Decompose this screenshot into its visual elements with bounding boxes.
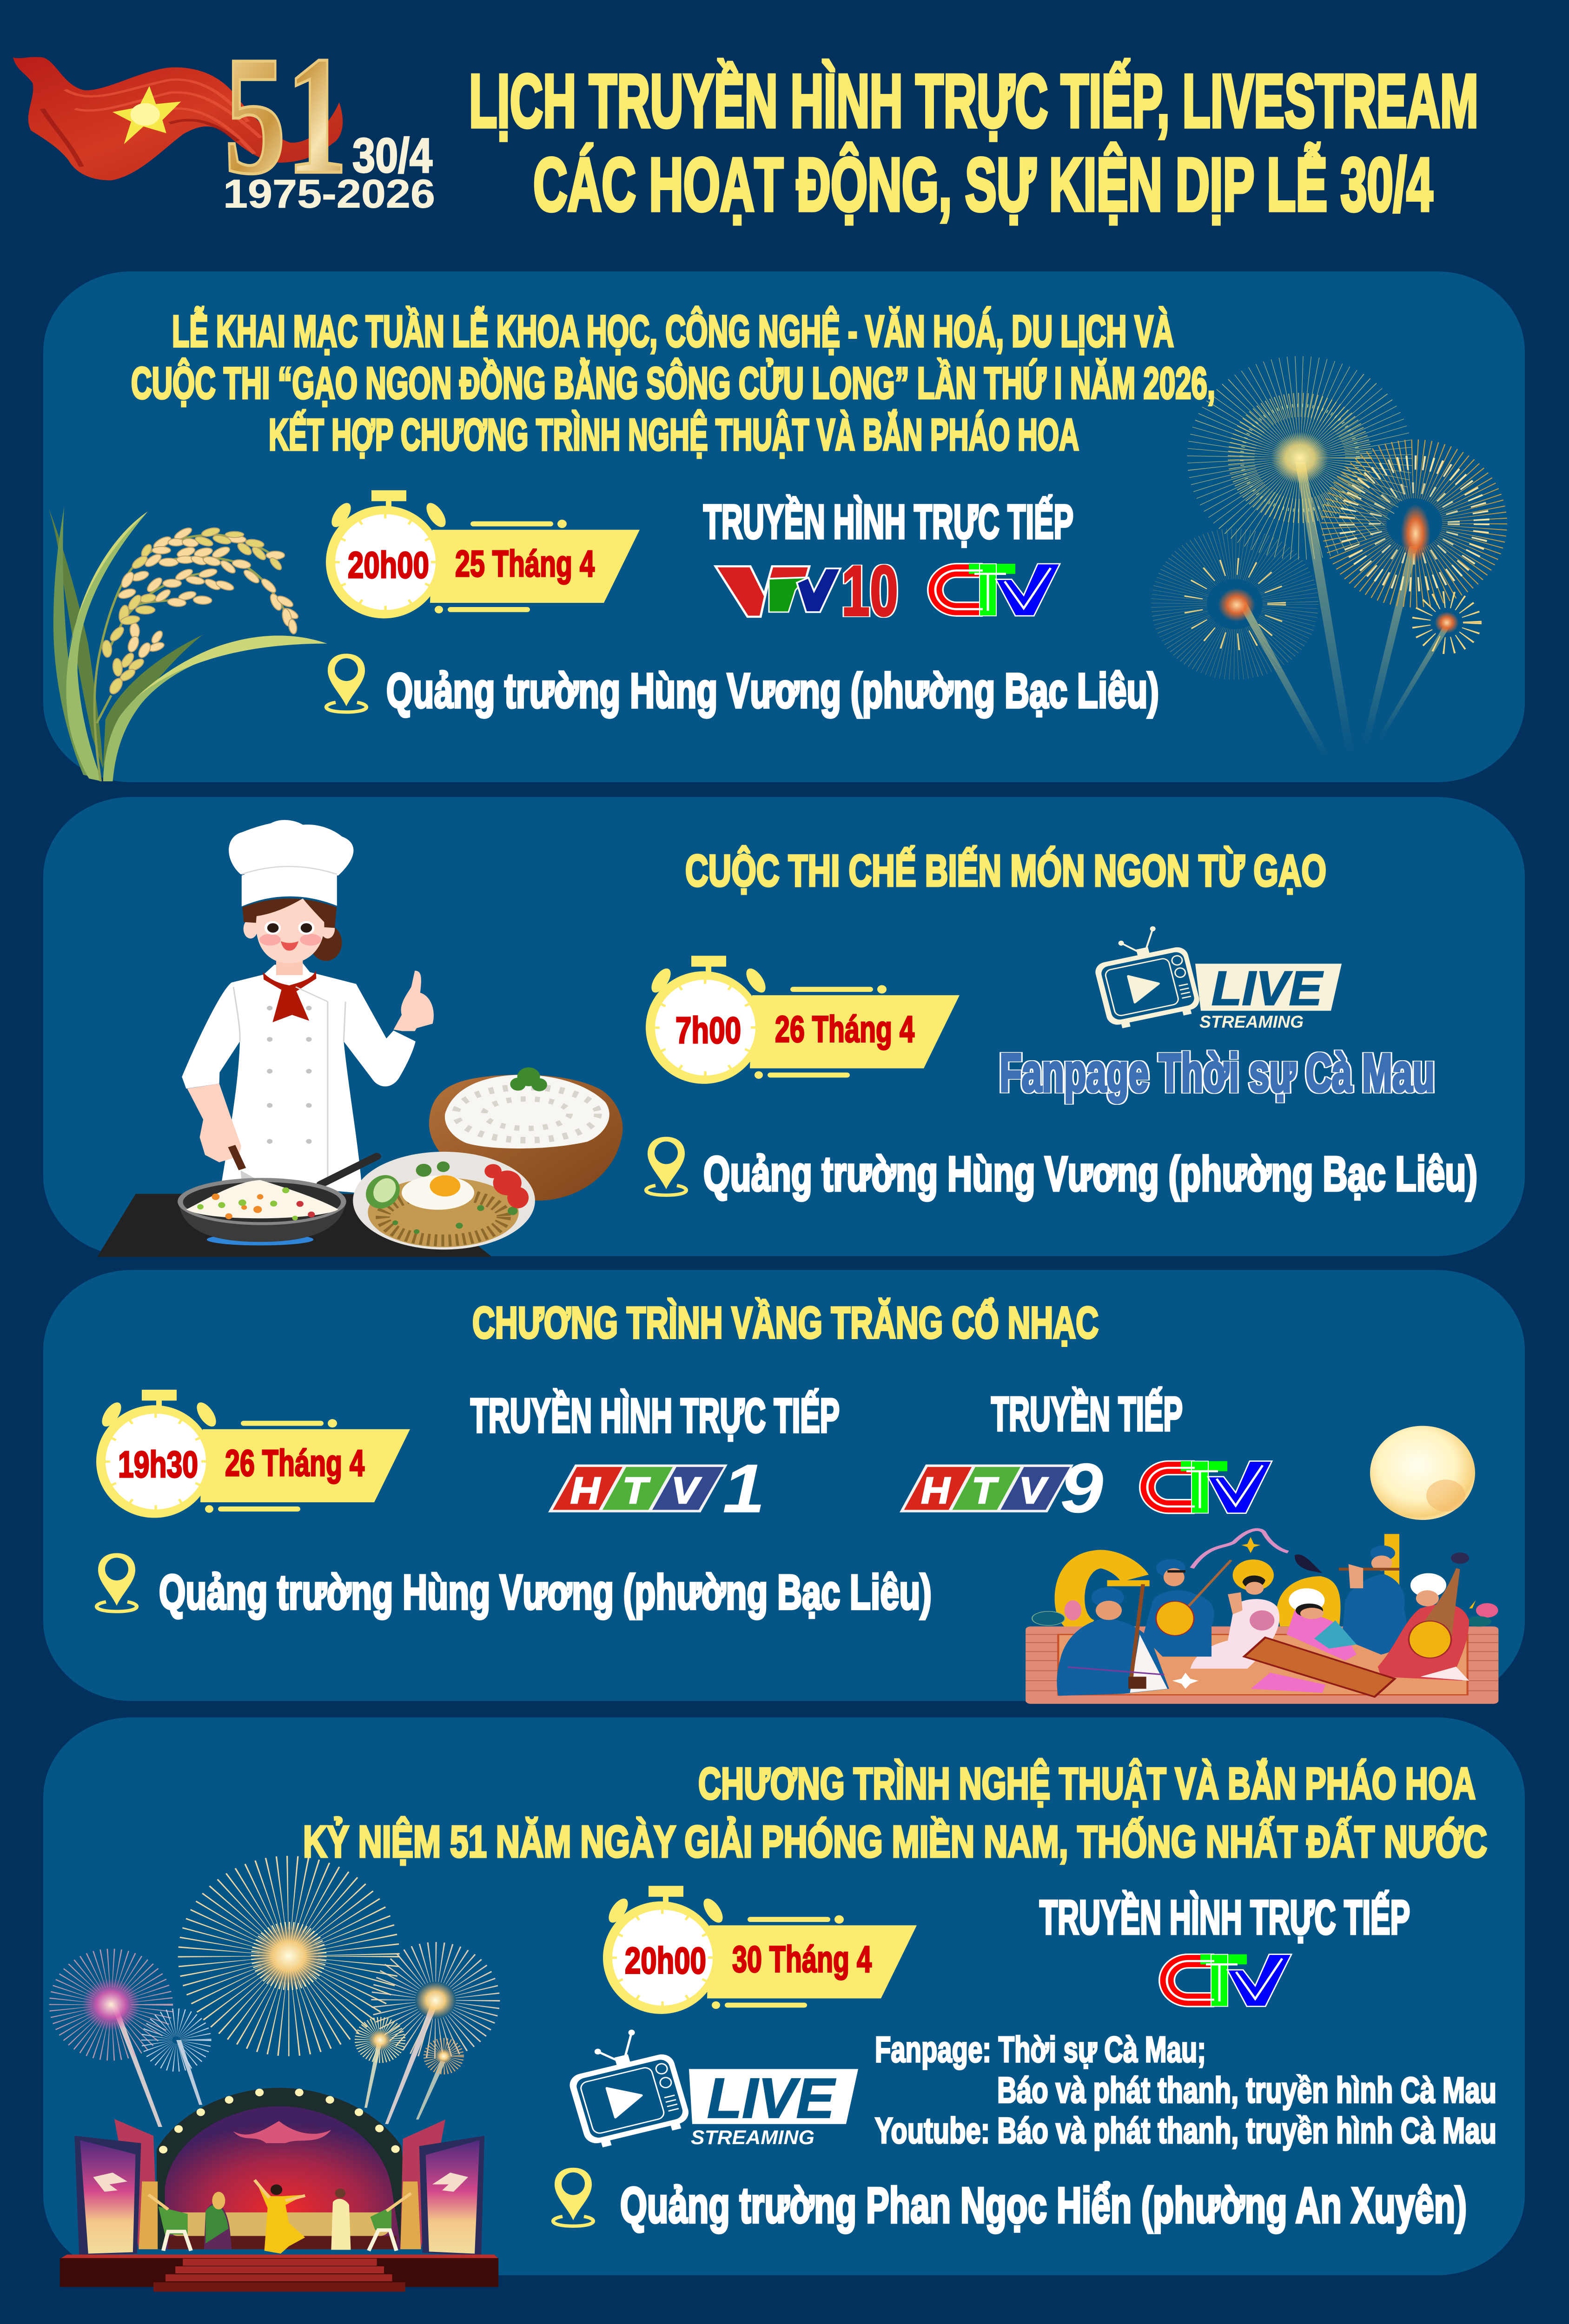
panel: opening ceremony 25 April: 10 — [841, 551, 898, 631]
icon: waving red flag with star — [13, 57, 343, 180]
livestream channels — [875, 2029, 1496, 2151]
flowers — [1032, 1600, 1498, 1627]
header logo: flag and 51 years emblem — [13, 21, 435, 216]
panel: moon music programme 26 April: 26 Tháng 4 — [225, 1443, 364, 1484]
illustration: traditional music ensemble — [1026, 1530, 1498, 1704]
logo: live streaming: STREAMING — [691, 2126, 814, 2149]
location pin — [646, 1137, 686, 1195]
zither player — [1244, 1588, 1395, 1697]
logo: live streaming: LIVE — [1212, 961, 1324, 1015]
icon: full moon — [1370, 1426, 1475, 1520]
logo: HTV9: 9 — [1060, 1448, 1103, 1527]
years 1975-2026: 1975-2026 — [223, 172, 435, 216]
stage base and stairs — [60, 2255, 498, 2291]
panel: opening ceremony 25 April: 25 Tháng 4 — [455, 543, 595, 585]
location pin — [97, 1553, 137, 1611]
illustration: stage and fireworks — [60, 1893, 498, 2291]
number 51 in gold: 51 — [224, 21, 348, 209]
time badge: 20h00 30 Tháng 4 — [603, 1886, 917, 2014]
title — [469, 59, 1478, 226]
side screens — [74, 2119, 484, 2256]
singer — [1190, 1559, 1279, 1669]
location pin — [553, 2168, 593, 2226]
time badge: 19h30 26 Tháng 4: 19h30 — [118, 1444, 198, 1485]
panel: rice cooking contest 26 April: 26 Tháng 4 — [775, 1009, 914, 1050]
stove — [97, 1194, 492, 1257]
logo: HTV1: 1 — [722, 1450, 765, 1527]
location pin — [326, 654, 366, 712]
heading: art programme and fireworks — [303, 1758, 1487, 1866]
panel: opening ceremony 25 April — [43, 271, 1525, 782]
icon: rice plant — [49, 506, 327, 781]
chef figure — [182, 898, 434, 1193]
frying pan — [178, 1156, 377, 1246]
heading: opening ceremony — [131, 306, 1215, 459]
time badge: 7h00 26 Tháng 4: 7h00 — [675, 1010, 741, 1051]
chef hat — [229, 820, 353, 906]
logo: live streaming: STREAMING — [1199, 1013, 1304, 1031]
bowl of white rice — [429, 1067, 623, 1201]
text: 30/4 — [352, 128, 432, 183]
panel: art programme and fireworks 30 April — [43, 1717, 1525, 2291]
logo: HTV9 — [900, 1448, 1103, 1527]
flute player — [1339, 1545, 1407, 1655]
logo: VTV10 — [715, 551, 898, 631]
illustration: chef with rice dishes — [97, 820, 623, 1257]
erhu player — [1057, 1584, 1169, 1696]
lute player — [1378, 1552, 1476, 1681]
time badge: 20h00 30 Tháng 4: 20h00 — [625, 1940, 706, 1981]
plate of fried rice — [353, 1152, 535, 1249]
time badge: 7h00 26 Tháng 4 — [646, 956, 960, 1084]
moon lute player — [1143, 1559, 1231, 1657]
logo: live streaming: LIVE — [707, 2067, 836, 2130]
rattan mat — [1026, 1626, 1498, 1704]
time badge: 20h00 25 Tháng 4 — [326, 490, 640, 618]
time badge: 19h30 26 Tháng 4 — [96, 1390, 410, 1518]
logo: CTV — [935, 564, 1060, 616]
stage arch — [157, 2088, 412, 2249]
icon: fireworks — [1179, 387, 1482, 756]
time badge: 20h00 25 Tháng 4: 20h00 — [348, 544, 429, 586]
logo: CTV — [1147, 1461, 1272, 1513]
panel: art programme and fireworks 30 April: 30 Tháng 4 — [732, 1939, 872, 1980]
performers — [149, 2180, 411, 2254]
logo: CTV — [1167, 1954, 1291, 2007]
panel: moon music programme 26 April — [43, 1270, 1525, 1704]
fireworks — [70, 1893, 478, 2127]
logo: HTV1 — [548, 1450, 765, 1527]
panel: rice cooking contest 26 April — [43, 797, 1525, 1257]
logo: live streaming — [1087, 921, 1342, 1031]
logo: live streaming — [558, 2022, 858, 2151]
